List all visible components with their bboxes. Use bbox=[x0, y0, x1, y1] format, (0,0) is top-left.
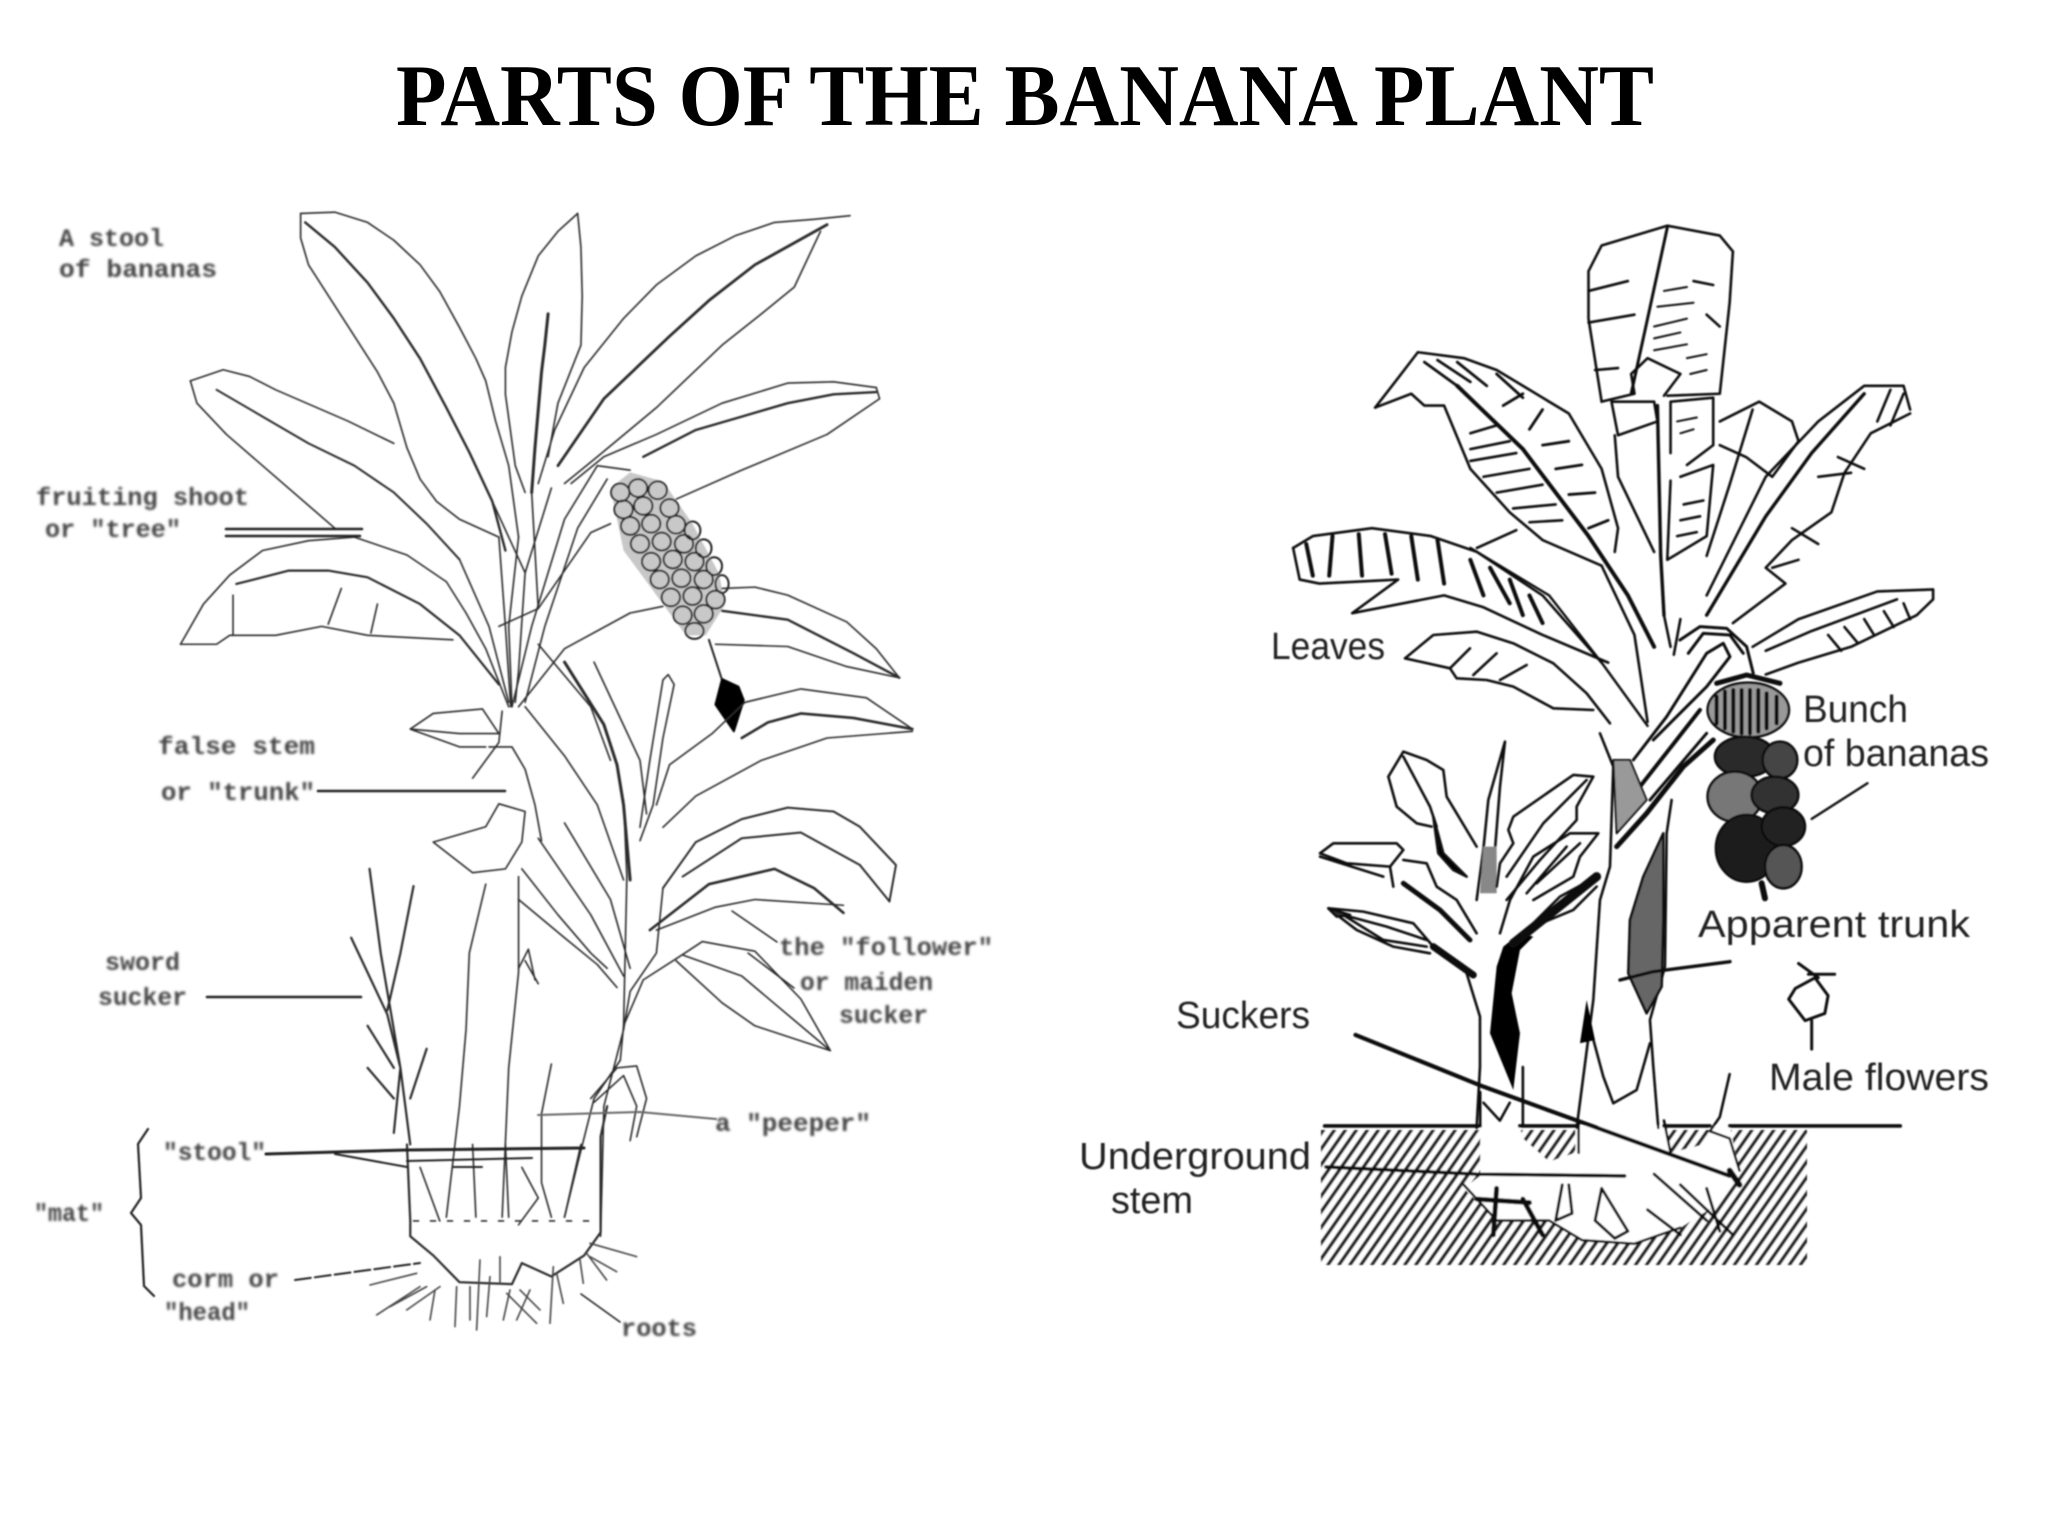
labels: left diagram: sucker bbox=[839, 1002, 928, 1031]
labels: banana plant diagram: Suckers bbox=[1176, 995, 1310, 1037]
stalk arch and sheaths bbox=[1633, 627, 1753, 760]
labels: banana plant diagram: of bananas bbox=[1803, 733, 1989, 775]
bunch hands bbox=[1708, 683, 1789, 737]
labels: left diagram: fruiting shoot bbox=[36, 484, 249, 513]
labels: left diagram: of bananas bbox=[59, 256, 217, 285]
panel: banana plant diagram bbox=[1293, 226, 1933, 1265]
labels: left diagram: "mat" bbox=[34, 1200, 104, 1229]
lower plant: trunk, followers, sword sucker, corm bbox=[351, 800, 896, 1284]
brace for mat bbox=[131, 1129, 154, 1296]
labels: banana plant diagram: Bunch bbox=[1803, 689, 1908, 731]
labels: left diagram: corm or bbox=[172, 1266, 279, 1295]
labels: banana plant diagram: Leaves bbox=[1271, 626, 1385, 668]
leader lines bbox=[207, 529, 794, 1322]
labels: left diagram: or "tree" bbox=[45, 516, 181, 545]
ground, leaders, corm, male flower bbox=[1325, 783, 1900, 1244]
labels: banana plant diagram: Apparent trunk bbox=[1698, 904, 1971, 946]
labels: banana plant diagram bbox=[1079, 626, 1989, 1222]
trunk shaded strip bbox=[1628, 833, 1663, 1013]
sucker leaves bbox=[1388, 752, 1477, 847]
panel: stool of bananas diagram bbox=[131, 212, 912, 1330]
labels: left diagram: or maiden bbox=[800, 969, 933, 998]
labels: left diagram: "stool" bbox=[163, 1139, 266, 1168]
labels: left diagram: "head" bbox=[164, 1299, 250, 1328]
right foliage and maiden sucker upper leaves bbox=[410, 587, 912, 880]
banana bunch and male bud bbox=[610, 472, 744, 731]
labels: left diagram: sucker bbox=[98, 984, 187, 1013]
corm and stem cut-outs in soil bbox=[1464, 1126, 1739, 1244]
labels: left diagram bbox=[34, 225, 993, 1344]
labels: left diagram: sword bbox=[105, 949, 180, 978]
labels: banana plant diagram: stem bbox=[1111, 1180, 1193, 1222]
labels: left diagram: the "follower" bbox=[779, 934, 993, 963]
lower-left main leaf bbox=[1405, 632, 1610, 723]
main plant upper leaves bbox=[1293, 226, 1933, 726]
sucker upper branches bbox=[1513, 877, 1597, 943]
labels: left diagram: false stem bbox=[158, 733, 315, 762]
roots bbox=[370, 1243, 637, 1330]
labels: left diagram: a "peeper" bbox=[715, 1110, 871, 1139]
labels: left diagram: roots bbox=[621, 1315, 697, 1344]
leader: apparent trunk bbox=[1620, 962, 1730, 980]
crown, pseudostem, bunch and sucker bbox=[1320, 627, 1805, 1128]
labels: left diagram: or "trunk" bbox=[161, 779, 315, 808]
labels: banana plant diagram: Underground bbox=[1079, 1136, 1311, 1178]
trunk edges bbox=[1577, 733, 1613, 1128]
title: PARTS OF THE BANANA PLANT bbox=[396, 48, 1654, 145]
soil hatching bbox=[1321, 1130, 1807, 1265]
labels: banana plant diagram: Male flowers bbox=[1769, 1057, 1989, 1099]
upper foliage of fruiting shoot bbox=[181, 212, 880, 707]
labels: left diagram: A stool bbox=[59, 225, 164, 254]
sucker black pseudostem bbox=[1490, 933, 1533, 1090]
